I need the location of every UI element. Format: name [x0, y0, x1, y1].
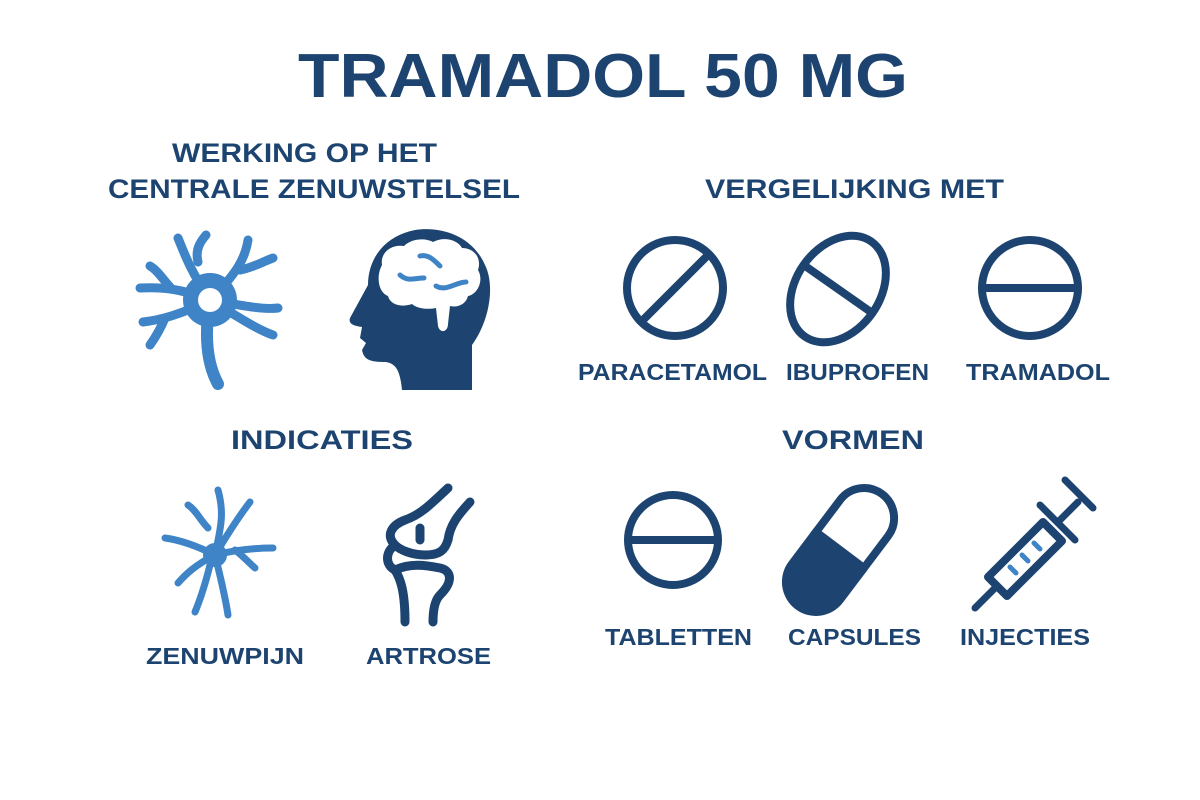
icon: neuron: [140, 235, 278, 384]
heading: vergelijking: VERGELIJKING MET: [705, 174, 1005, 204]
label: artrose: ARTROSE: [366, 643, 491, 669]
panel: werking: [108, 138, 520, 390]
icon: tramadol: [982, 240, 1078, 336]
panel: vergelijking: [578, 174, 1110, 385]
icon: head with brain: [350, 229, 490, 390]
panel: indicaties: [146, 425, 491, 669]
label: tabletten: TABLETTEN: [605, 624, 752, 650]
icon: paracetamol: [627, 240, 723, 336]
panel: vormen: [605, 425, 1093, 650]
label: zenuwpijn: ZENUWPIJN: [146, 643, 304, 669]
heading: indicaties: INDICATIES: [231, 425, 413, 455]
heading: werking: CENTRALE ZENUWSTELSEL: [108, 174, 520, 204]
heading: vormen: VORMEN: [782, 425, 924, 455]
icon: capsule: [768, 474, 909, 630]
heading: werking: [108, 138, 520, 204]
icon: nerve: [165, 490, 273, 615]
icon: knee: [388, 488, 470, 622]
heading: werking: WERKING OP HET: [172, 138, 438, 168]
label: ibuprofen: IBUPROFEN: [786, 359, 929, 385]
icon: ibuprofen: [770, 217, 906, 361]
icon: tablet: [628, 495, 718, 585]
title: TRAMADOL 50 MG: [298, 42, 908, 111]
label: paracetamol: PARACETAMOL: [578, 359, 767, 385]
label: capsules: CAPSULES: [788, 624, 921, 650]
icon: syringe: [975, 480, 1093, 608]
label: injecties: INJECTIES: [960, 624, 1090, 650]
label: tramadol: TRAMADOL: [966, 359, 1110, 385]
